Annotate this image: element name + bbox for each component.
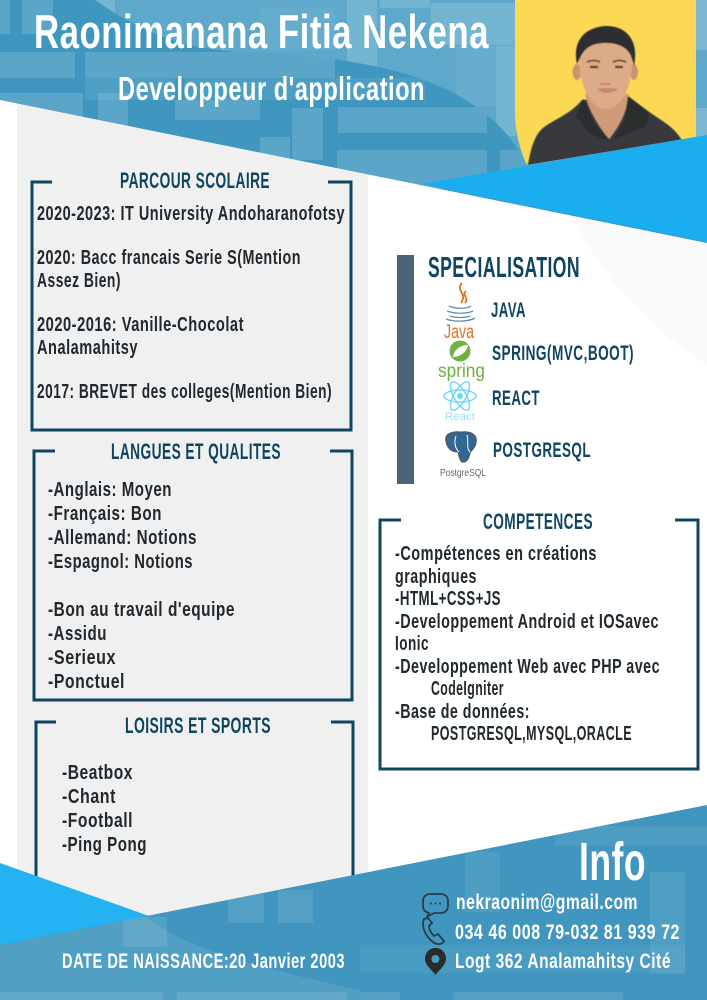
languages and qualities list: -Assidu xyxy=(48,623,107,645)
languages and qualities list: -Bon au travail d'equipe xyxy=(48,599,235,621)
school history text: 2020: Bacc francais Serie S(Mention xyxy=(37,247,301,269)
skills list: -Compétences en créations xyxy=(395,543,597,565)
label: react: REACT xyxy=(492,387,540,410)
footer background with maze pattern xyxy=(0,800,707,1000)
heading: parcour scolaire: PARCOUR SCOLAIRE xyxy=(120,168,270,193)
languages and qualities list: -Espagnol: Notions xyxy=(48,551,193,573)
icon: spring xyxy=(438,340,485,382)
panel: langues et qualites xyxy=(34,439,352,700)
info heading: Info xyxy=(579,832,646,892)
panel: specialisation xyxy=(397,252,634,484)
icon: react: React xyxy=(445,411,475,423)
languages and qualities list: -Allemand: Notions xyxy=(48,527,197,549)
school history text: Analamahitsy xyxy=(37,337,138,359)
gray background panel xyxy=(17,100,368,960)
icon: spring: spring xyxy=(438,361,485,382)
header background with maze pattern xyxy=(0,0,707,250)
school history text: 2020-2016: Vanille-Chocolat xyxy=(37,314,244,336)
heading: langues et qualites: LANGUES ET QUALITES xyxy=(111,439,281,464)
icon: java xyxy=(444,283,475,343)
vertical bar xyxy=(397,255,414,484)
portrait photo xyxy=(527,26,683,170)
hobbies list: -Beatbox xyxy=(62,762,133,784)
icon: chat bubble xyxy=(423,894,448,917)
heading: loisirs et sports: LOISIRS ET SPORTS xyxy=(125,713,271,738)
skills list: -HTML+CSS+JS xyxy=(395,588,501,610)
icon: postgresql: PostgreSQL xyxy=(440,468,486,479)
label: spring: SPRING(MVC,BOOT) xyxy=(492,342,634,365)
skills list: Ionic xyxy=(395,633,429,655)
school history text xyxy=(37,203,345,403)
skills list: graphiques xyxy=(395,566,477,588)
panel: loisirs et sports xyxy=(36,713,353,900)
languages and qualities list: -Français: Bon xyxy=(48,503,162,525)
hobbies list xyxy=(62,762,147,856)
hobbies list: -Ping Pong xyxy=(62,834,147,856)
name title: Raonimanana Fitia Nekena xyxy=(34,5,489,58)
heading: specialisation: SPECIALISATION xyxy=(428,252,580,284)
hobbies list: -Chant xyxy=(62,786,116,808)
skills list: CodeIgniter xyxy=(431,678,504,700)
hobbies list: -Football xyxy=(62,810,133,832)
heading: competences: COMPETENCES xyxy=(483,509,593,534)
light blue footer triangle xyxy=(0,863,149,950)
email: nekraonim@gmail.com xyxy=(456,891,638,914)
icon: java: Java xyxy=(444,322,474,343)
label: postgresql: POSTGRESQL xyxy=(493,439,591,462)
faint white-grey curve at right xyxy=(565,200,707,365)
panel: competences xyxy=(380,509,698,769)
light blue wedge under portrait xyxy=(421,135,707,242)
yellow portrait background xyxy=(515,0,696,165)
school history text: 2020-2023: IT University Andoharanofotsy xyxy=(37,203,345,225)
languages and qualities list: -Serieux xyxy=(48,647,116,669)
icon: react xyxy=(444,379,476,423)
label: java: JAVA xyxy=(491,299,526,322)
languages and qualities list xyxy=(48,479,235,693)
job subtitle: Developpeur d'application xyxy=(118,70,425,107)
school history text: Assez Bien) xyxy=(37,270,121,292)
languages and qualities list: -Ponctuel xyxy=(48,671,125,693)
skills list: -Base de données: xyxy=(395,701,530,723)
school history text: 2017: BREVET des colleges(Mention Bien) xyxy=(37,381,332,403)
skills list xyxy=(395,543,660,745)
languages and qualities list: -Anglais: Moyen xyxy=(48,479,172,501)
icon: postgresql xyxy=(440,432,486,479)
date of birth: DATE DE NAISSANCE:20 Janvier 2003 xyxy=(62,950,345,973)
panel: parcours scolaire xyxy=(32,168,351,430)
icon: location pin xyxy=(425,948,446,975)
icon: phone xyxy=(423,918,444,944)
